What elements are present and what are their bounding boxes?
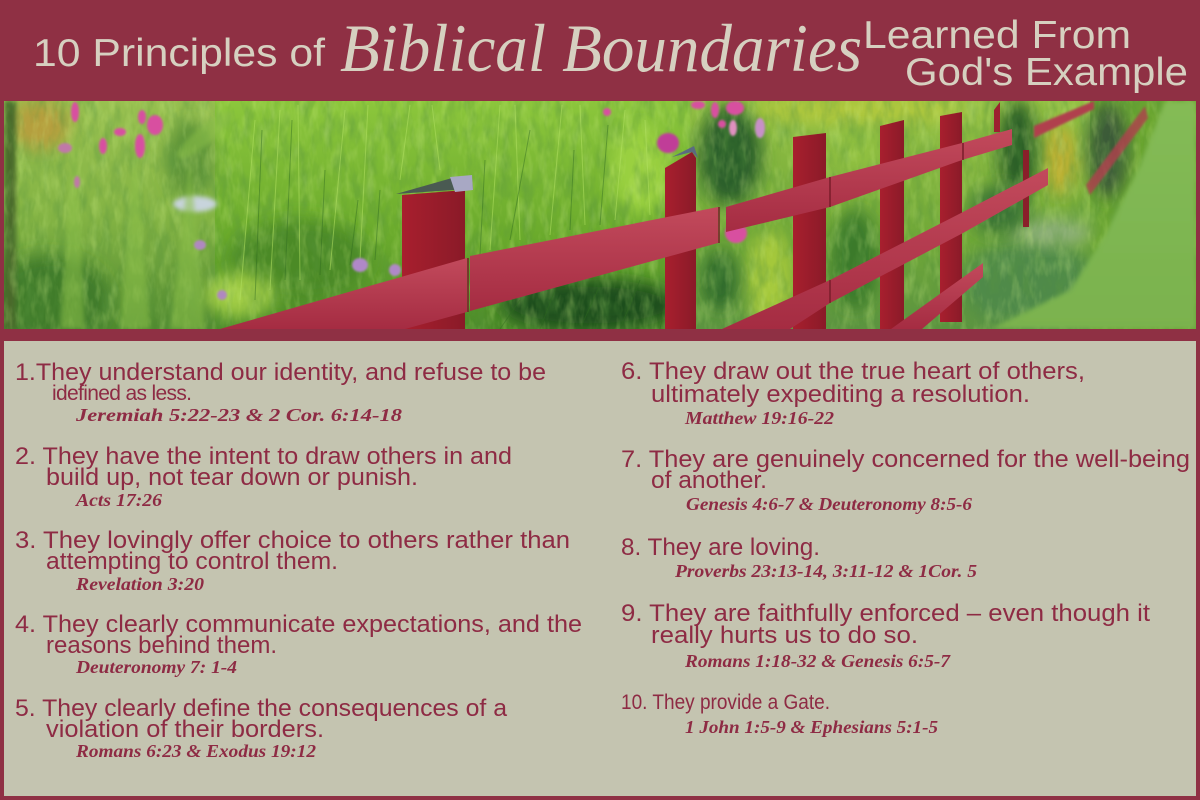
principle 7 bbox=[621, 446, 1190, 514]
principle 3 bbox=[15, 527, 570, 594]
principle 6 bbox=[621, 358, 1085, 428]
principle 2: build up, not tear down or punish. bbox=[46, 464, 418, 491]
principle 4 bbox=[15, 611, 582, 677]
title: Learned From: Learned From bbox=[863, 14, 1131, 57]
car glimpse behind plants bbox=[173, 196, 217, 212]
principle 1: idefined as less. bbox=[52, 382, 192, 405]
principle 3: Revelation 3:20 bbox=[75, 574, 204, 594]
post 2 cap bbox=[672, 146, 698, 158]
principle 9: 9. They are faithfully enforced – even though it bbox=[621, 600, 1150, 627]
principle 9 bbox=[621, 600, 1150, 671]
principle 7: Genesis 4:6-7 & Deuteronomy 8:5-6 bbox=[686, 494, 972, 514]
principle 4: 4. They clearly communicate expectations, and the bbox=[15, 611, 582, 638]
principle 6: 6. They draw out the true heart of others, bbox=[621, 358, 1085, 385]
principle 2: Acts 17:26 bbox=[75, 490, 162, 510]
principle 8: 8. They are loving. bbox=[621, 534, 820, 561]
principle 8: Proverbs 23:13-14, 3:11-12 & 1Cor. 5 bbox=[674, 561, 977, 581]
distant rails bbox=[1034, 101, 1148, 195]
principle 5: Romans 6:23 & Exodus 19:12 bbox=[75, 741, 316, 761]
principle 4: reasons behind them. bbox=[46, 632, 277, 659]
photo: red fence and garden bbox=[0, 96, 1196, 345]
principle 4: Deuteronomy 7: 1-4 bbox=[75, 657, 237, 677]
garden background bbox=[0, 96, 1196, 345]
principle 3: 3. They lovingly offer choice to others rather than bbox=[15, 527, 570, 554]
rear fence posts bbox=[665, 102, 1029, 329]
principle 2 bbox=[15, 443, 512, 510]
rail joints bbox=[468, 143, 963, 312]
lawn bbox=[990, 101, 1196, 329]
title: Biblical Boundaries: Biblical Boundaries bbox=[340, 10, 862, 86]
principle 6: ultimately expediting a resolution. bbox=[651, 381, 1030, 408]
principle 1 bbox=[15, 359, 546, 425]
principle 6: Matthew 19:16-22 bbox=[684, 408, 834, 428]
principle 7: of another. bbox=[651, 467, 767, 494]
foliage strands bbox=[240, 105, 650, 300]
principle 8 bbox=[621, 534, 977, 581]
principle 5: violation of their borders. bbox=[46, 716, 324, 743]
principle 7: 7. They are genuinely concerned for the well-being bbox=[621, 446, 1190, 473]
principle 5 bbox=[15, 695, 508, 761]
title banner bbox=[33, 10, 1188, 94]
title: 10 Principles of: 10 Principles of bbox=[33, 32, 325, 75]
principle 5: 5. They clearly define the consequences of a bbox=[15, 695, 508, 722]
principle 1: Jeremiah 5:22-23 & 2 Cor. 6:14-18 bbox=[75, 405, 402, 425]
principle 9: really hurts us to do so. bbox=[651, 622, 918, 649]
blurred foreground plant bbox=[58, 120, 218, 329]
principle 10: 10. They provide a Gate. bbox=[621, 691, 830, 714]
upper rails bbox=[220, 129, 1012, 329]
principle 10 bbox=[621, 691, 938, 737]
principle 1: 1.They understand our identity, and refuse to be bbox=[15, 359, 546, 386]
pink flowers bbox=[58, 101, 765, 300]
main front post bbox=[396, 175, 473, 329]
text panel bbox=[4, 341, 1196, 796]
principle 10: 1 John 1:5-9 & Ephesians 5:1-5 bbox=[685, 717, 938, 737]
principle 2: 2. They have the intent to draw others in and bbox=[15, 443, 512, 470]
principle 9: Romans 1:18-32 & Genesis 6:5-7 bbox=[684, 651, 951, 671]
title: God's Example: God's Example bbox=[905, 51, 1188, 94]
principle 3: attempting to control them. bbox=[46, 548, 338, 575]
lower rails bbox=[722, 168, 1048, 329]
